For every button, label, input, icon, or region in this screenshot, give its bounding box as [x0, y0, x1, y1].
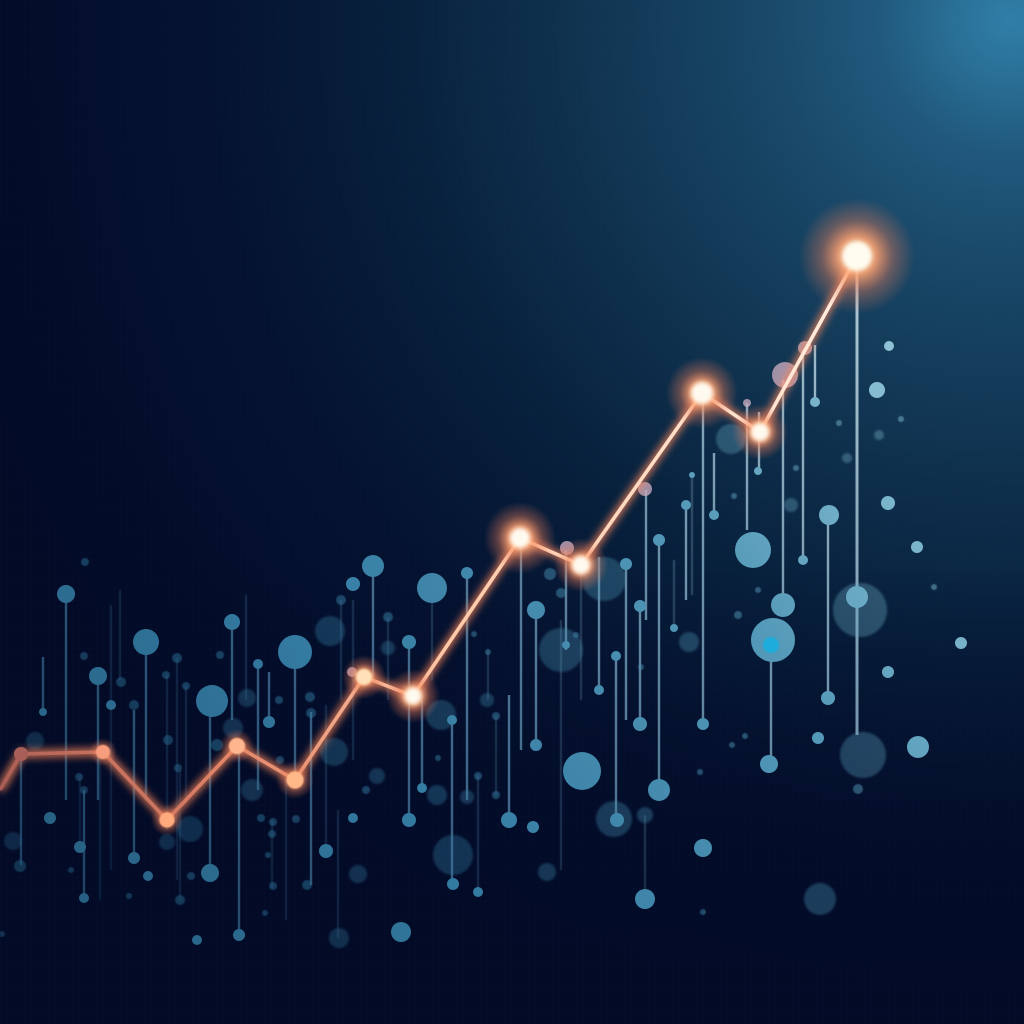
pink tinted dots near the line	[347, 341, 812, 677]
small faint dots	[0, 416, 937, 937]
trend line	[0, 256, 857, 820]
faint background stems	[80, 475, 692, 938]
data dots	[39, 341, 967, 945]
faint bokeh circles	[4, 424, 887, 948]
data stems	[21, 256, 857, 935]
glowing data points	[14, 198, 915, 836]
trend line glow	[0, 256, 857, 820]
bright cyan point	[763, 637, 779, 653]
